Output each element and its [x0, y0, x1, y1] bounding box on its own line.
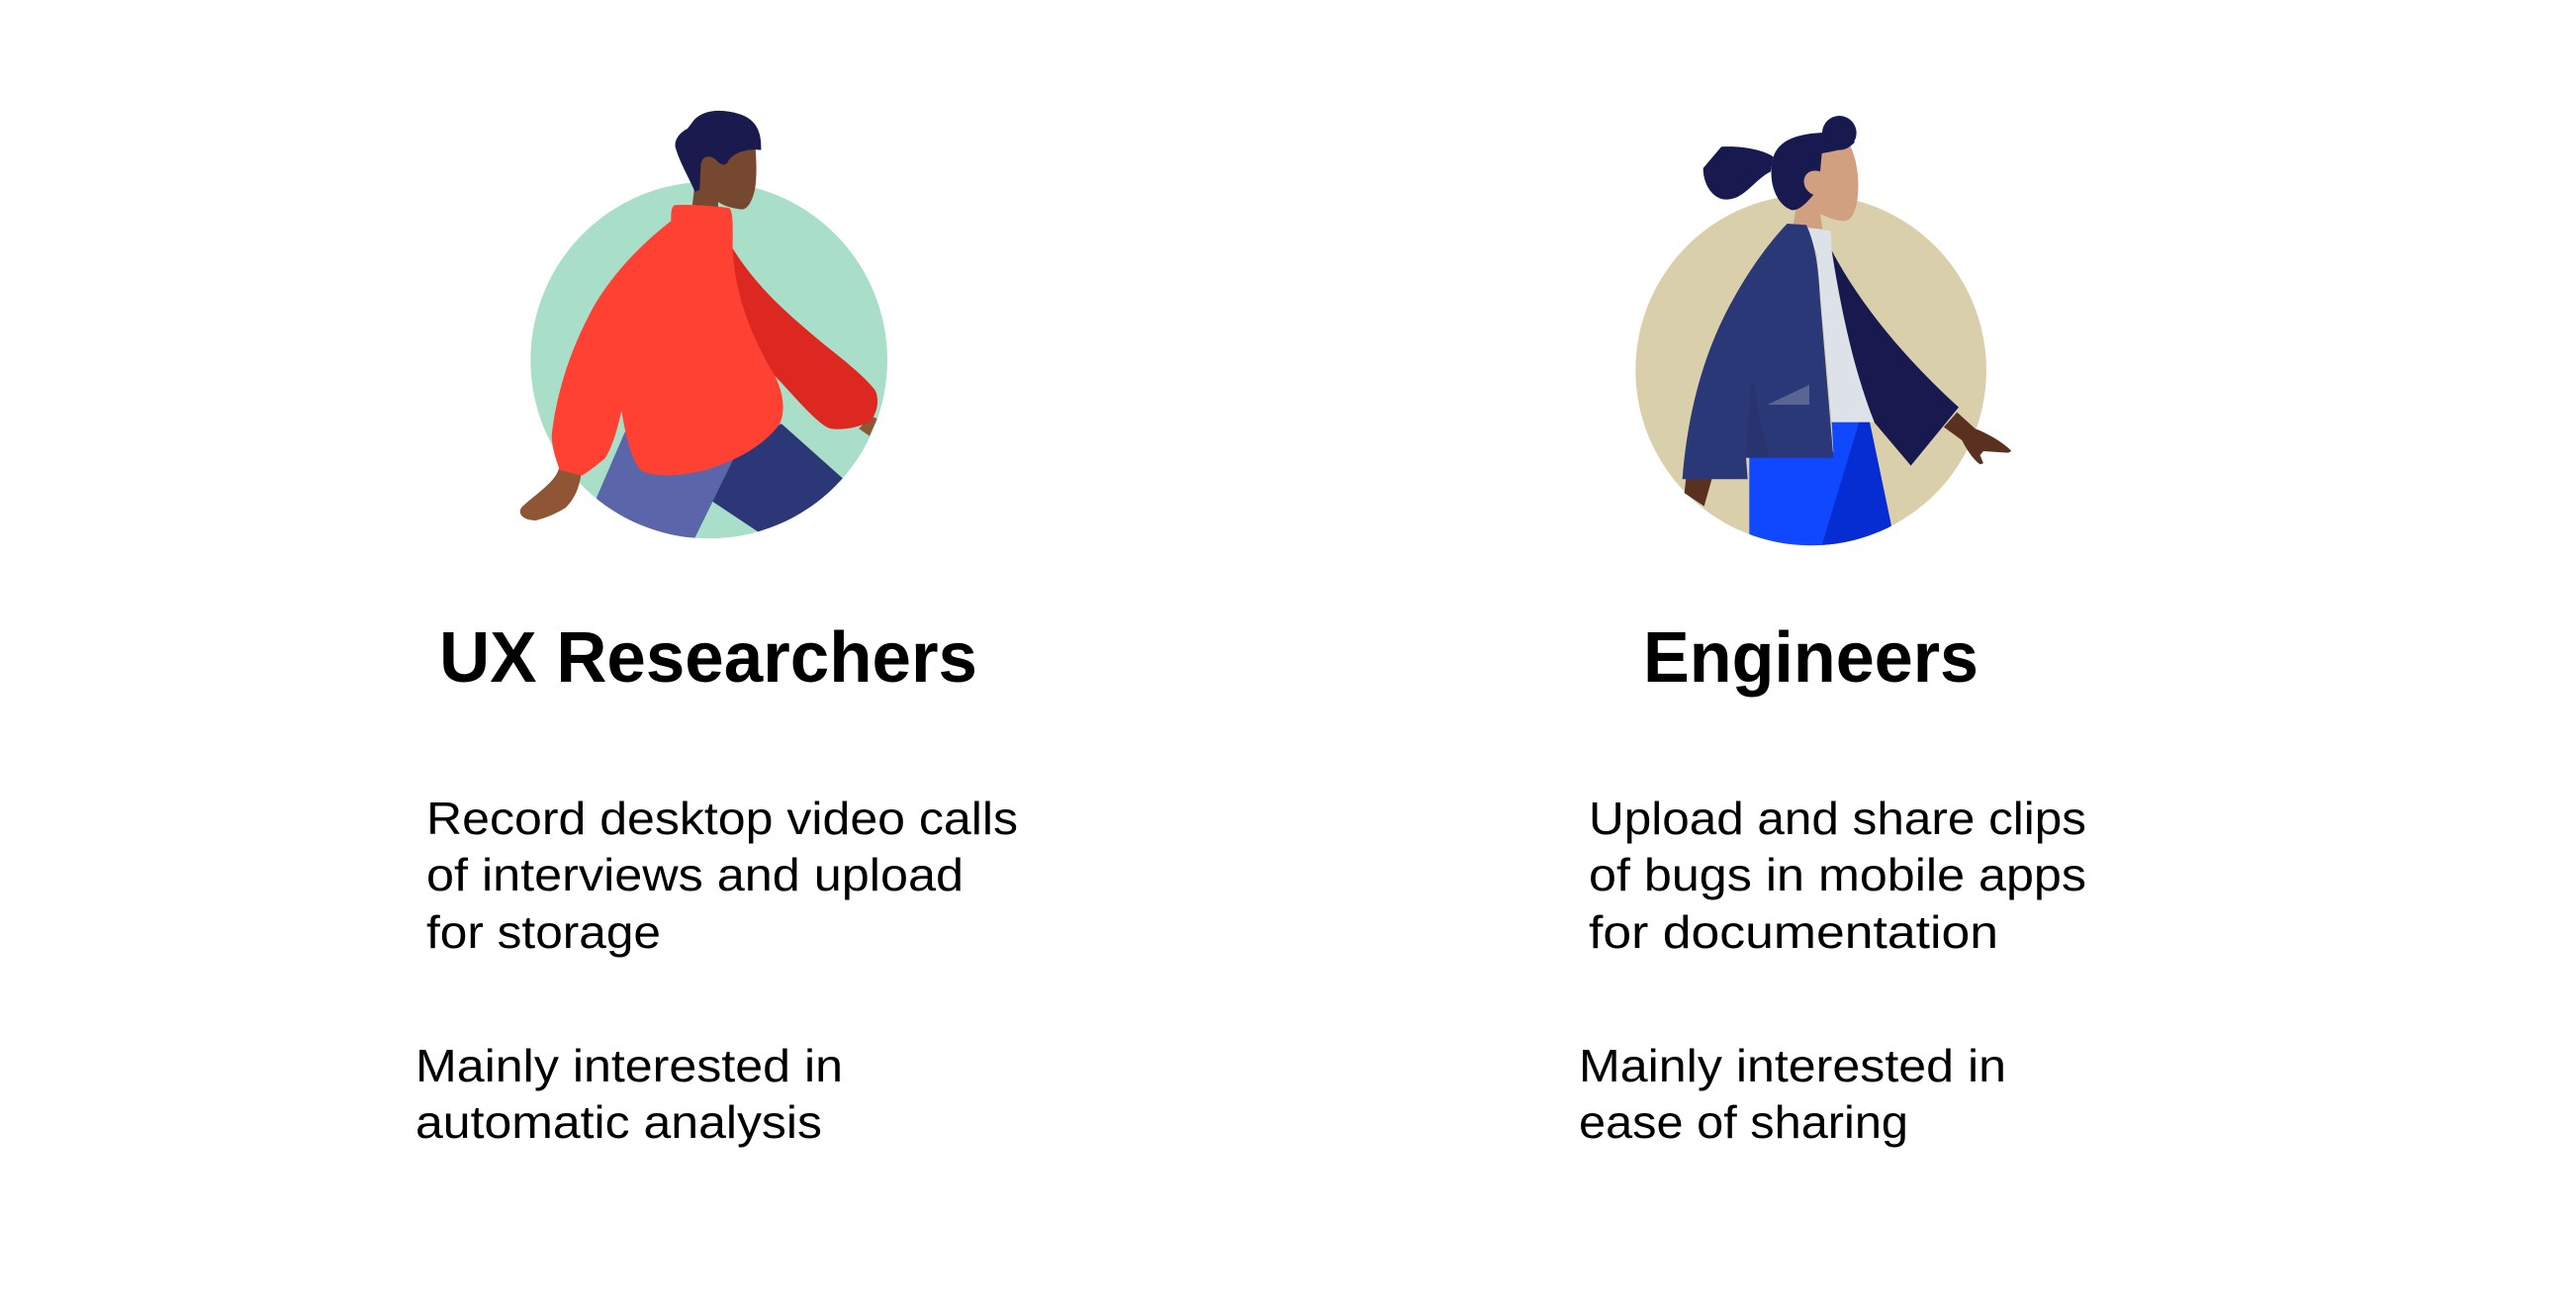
text block: researcher activities: for storage [426, 906, 661, 958]
icon: UX researcher illustration [520, 111, 887, 551]
text block: researcher interests: Mainly interested in [415, 1040, 843, 1091]
text block: engineer activities [1589, 793, 2086, 958]
hair bun [1822, 116, 1857, 150]
heading: UX Researchers: UX Researchers [439, 618, 977, 698]
text block: researcher activities: Record desktop video calls [426, 793, 1018, 844]
text block: researcher activities [426, 793, 1018, 958]
panel: Engineers [1579, 116, 2086, 1148]
text block: engineer activities: for documentation [1589, 906, 1998, 958]
heading: Engineers: Engineers [1643, 618, 1978, 698]
text block: researcher interests [415, 1040, 843, 1148]
text block: researcher interests: automatic analysis [415, 1096, 822, 1148]
text block: engineer activities: of bugs in mobile apps [1589, 849, 2086, 900]
text block: engineer interests: Mainly interested in [1579, 1040, 2006, 1091]
panel: UX Researchers [415, 111, 1018, 1148]
icon: engineer illustration [1635, 116, 2011, 551]
text block: researcher activities: of interviews and upload [426, 849, 964, 900]
text block: engineer interests: ease of sharing [1579, 1096, 1908, 1148]
text block: engineer interests [1579, 1040, 2006, 1148]
text block: engineer activities: Upload and share clips [1589, 793, 2086, 844]
